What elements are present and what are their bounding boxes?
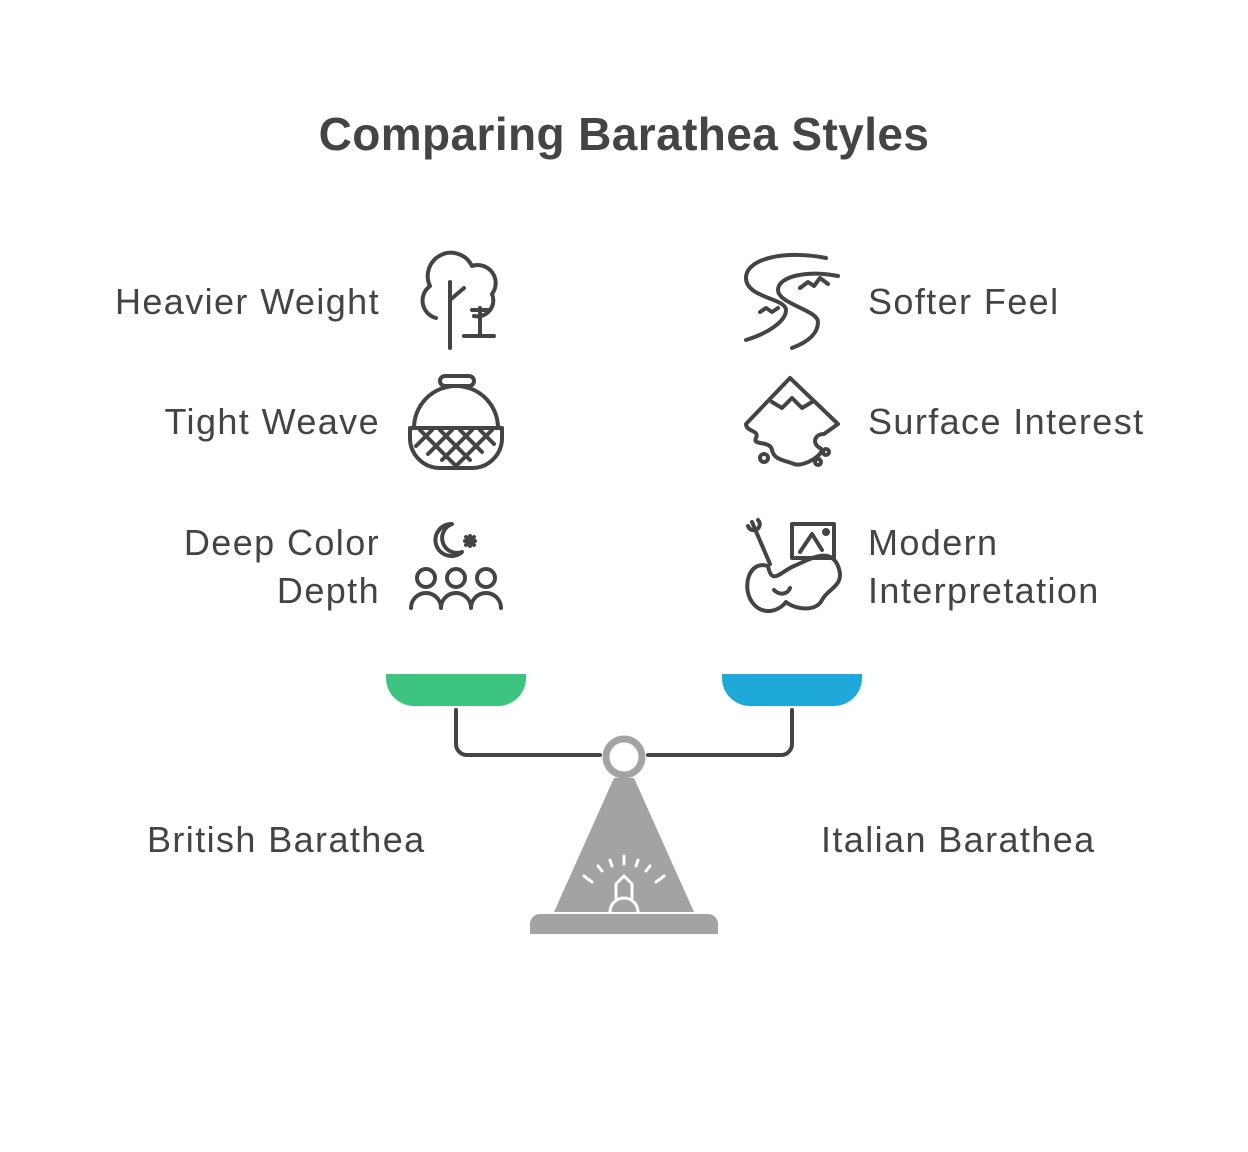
- icon: mountain: [746, 378, 838, 465]
- label: heavier weight: Heavier Weight: [115, 281, 380, 322]
- label: softer feel: Softer Feel: [868, 281, 1059, 322]
- icon: basket: [410, 376, 502, 468]
- label: surface interest: Surface Interest: [868, 401, 1145, 442]
- label: deep color depth: [184, 522, 380, 611]
- label: british barathea: British Barathea: [147, 819, 426, 860]
- label: modern interpretation: Modern: [868, 522, 998, 563]
- icon: tree: [423, 253, 496, 348]
- title: Comparing Barathea Styles: [319, 108, 929, 160]
- label: italian barathea: Italian Barathea: [821, 819, 1096, 860]
- scale: [386, 674, 862, 934]
- label: deep color depth: Deep Color: [184, 522, 380, 563]
- icon: moon and people: [411, 524, 501, 608]
- icon: art and elephant: [747, 520, 840, 611]
- pan: blue: [722, 674, 862, 706]
- label: tight weave: Tight Weave: [164, 401, 380, 442]
- label: modern interpretation: [868, 522, 1100, 611]
- pan: green: [386, 674, 526, 706]
- label: modern interpretation: Interpretation: [868, 570, 1100, 611]
- label: deep color depth: Depth: [277, 570, 380, 611]
- icon: river: [746, 255, 838, 348]
